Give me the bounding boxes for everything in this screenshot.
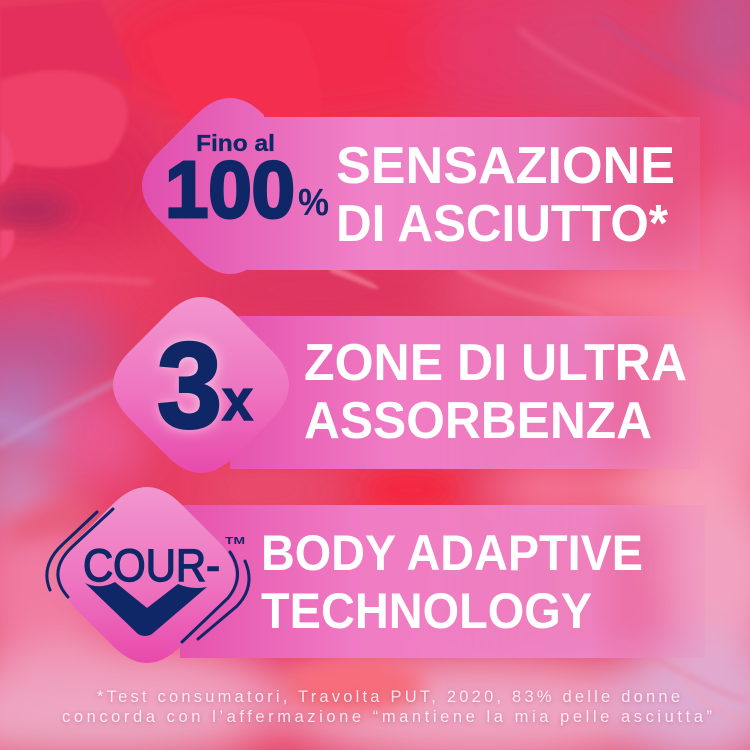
heading: zone di ultra assorbenza [304, 334, 687, 450]
panel: body adaptive technology [47, 487, 705, 663]
heading: zone di ultra assorbenza: ZONE DI ULTRA [304, 334, 687, 392]
footnote [62, 688, 712, 726]
badge: fino al 100%: Fino al [196, 130, 275, 156]
badge: 3x: 3 [157, 317, 222, 453]
heading: zone di ultra assorbenza: ASSORBENZA [304, 392, 652, 450]
panel: 100% dryness banner [142, 98, 700, 274]
badge: fino al 100%: 100 [165, 145, 295, 234]
banner 1 shape with arrow badge [142, 98, 700, 274]
logo: Cour-V [47, 509, 249, 642]
petals [0, 0, 378, 289]
banner 2 [230, 316, 700, 469]
badge: 3x: x [222, 368, 253, 433]
logo: Cour-V: COUR- [83, 540, 220, 591]
heading: sensazione di asciutto: DI ASCIUTTO* [336, 195, 669, 253]
badge: 3x: 3 [157, 317, 222, 453]
badge: fino al 100% [165, 130, 329, 234]
panel: 3x absorbency zones [113, 297, 700, 473]
heading: body adaptive technology [261, 525, 643, 639]
heading: sensazione di asciutto [336, 137, 675, 253]
heading: body adaptive technology: BODY ADAPTIVE [261, 525, 643, 581]
footnote: concorda con l’affermazione “mantiene la mia pelle asciutta” [62, 708, 712, 726]
badge diamond [113, 297, 289, 473]
badge: fino al 100%: % [298, 182, 329, 224]
logo: Cour-V: TM [225, 536, 245, 547]
heading: sensazione di asciutto: SENSAZIONE [336, 137, 675, 195]
heading: body adaptive technology: TECHNOLOGY [261, 583, 592, 639]
banner 3 [180, 505, 705, 658]
footnote: *Test consumatori, Travolta PUT, 2020, 83% delle donne [97, 688, 680, 706]
badge diamond [59, 487, 235, 663]
